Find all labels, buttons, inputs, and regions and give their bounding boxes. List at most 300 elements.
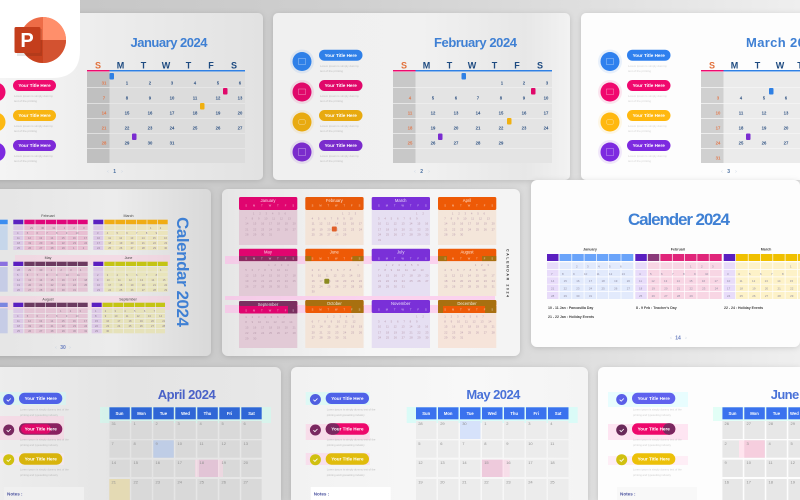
table: January: January bbox=[583, 248, 597, 252]
calendar grid: June: 12 bbox=[790, 460, 796, 465]
table: June: 23 24 25 26 27 28 29 bbox=[97, 288, 168, 292]
calendar grid: March: 25 bbox=[739, 140, 744, 146]
calendar grid: January: 28 bbox=[102, 140, 107, 146]
calendar grid: January: 12 bbox=[216, 96, 221, 100]
month: July: 1 2 3 4 5 6 bbox=[386, 263, 419, 267]
month: June: 16 17 18 19 20 21 22 bbox=[312, 279, 362, 283]
title pills: January bbox=[0, 80, 56, 163]
check list: April: Your Title Here bbox=[25, 396, 57, 401]
table: Februari: 29 30 31 1 2 3 bbox=[30, 226, 85, 230]
table: May: 26 27 28 29 30 31 bbox=[17, 288, 76, 292]
calendar grid: January: 6 bbox=[239, 80, 242, 86]
calendar grid: January: 31 bbox=[170, 140, 175, 146]
pagination: 14: ‹ bbox=[670, 336, 672, 342]
month: January: 21 22 23 24 25 26 27 bbox=[245, 227, 296, 231]
calendar grid: June: Mon bbox=[750, 411, 759, 416]
calendar grid: January: 16 bbox=[148, 110, 153, 116]
month: November: 3 4 5 6 7 8 9 bbox=[378, 319, 418, 323]
calendar grid: February bbox=[393, 60, 552, 163]
icon: PowerPoint logo: P bbox=[20, 30, 34, 52]
table: June: June bbox=[125, 256, 132, 260]
table: Februari: 4 5 6 7 8 9 10 bbox=[17, 231, 79, 235]
month: February: 18 19 20 21 22 23 24 bbox=[312, 227, 362, 231]
table: Februari: Februari bbox=[671, 248, 685, 252]
month: November: 10 11 12 13 14 15 16 bbox=[378, 325, 429, 329]
calendar grid: May: 1 bbox=[484, 421, 487, 426]
month: May bbox=[239, 249, 297, 296]
title: April 2024: April 2024 bbox=[158, 387, 216, 402]
calendar grid: February: M bbox=[423, 60, 430, 70]
table: June bbox=[93, 256, 168, 292]
table: May: 12 13 14 15 16 17 18 bbox=[17, 278, 88, 282]
month: May: May bbox=[264, 249, 273, 254]
table: March: 10 11 12 13 14 15 bbox=[727, 279, 793, 283]
calendar grid: February: 7 bbox=[477, 96, 480, 100]
calendar grid: January: 20 bbox=[238, 110, 243, 116]
event notes: 21 - 22 Jan : Holiday Events bbox=[548, 315, 594, 319]
calendar grid: June: Tue bbox=[773, 411, 781, 416]
calendar grid: February: 3 bbox=[546, 80, 549, 86]
month: November: 24 25 26 27 28 29 30 bbox=[378, 336, 429, 340]
month: August: 11 12 13 14 15 16 17 bbox=[444, 273, 495, 277]
calendar grid: April: Fri bbox=[227, 411, 232, 416]
table: March: 3 4 5 6 7 8 bbox=[727, 272, 784, 276]
calendar grid: May: 16 bbox=[506, 460, 511, 465]
pagination: 3: 3 bbox=[727, 169, 730, 175]
pagination: 14 bbox=[670, 336, 687, 342]
table: Februari: 4 5 6 7 8 9 10 bbox=[639, 272, 709, 276]
highlighted date: June bbox=[324, 279, 329, 284]
calendar grid: March: 17 bbox=[716, 126, 721, 130]
calendar grid: February: S bbox=[401, 60, 407, 70]
highlight bands bbox=[306, 392, 578, 465]
topic list: February: Lorem ipsum is simply dummy bbox=[320, 94, 359, 98]
calendar grid: February: T bbox=[492, 60, 498, 70]
calendar grid: May: 2 bbox=[506, 421, 509, 426]
calendar grid: May: Tue bbox=[467, 411, 474, 416]
title pills: January: Lorem ipsum is simply dummy bbox=[14, 154, 53, 158]
calendar grid: May: Thu bbox=[510, 411, 518, 416]
topic list: March: text of the printing bbox=[628, 159, 651, 163]
month: October: 1 2 3 4 5 bbox=[327, 314, 354, 318]
calendar grid: May: 28 bbox=[418, 421, 423, 426]
event notes: 10 - 11 Jan : Pancasilla Day bbox=[548, 306, 593, 310]
month: August: S M T W T F S bbox=[444, 257, 493, 261]
topic list: March: Lorem ipsum is simply dummy bbox=[628, 94, 667, 98]
table: September: September bbox=[119, 298, 138, 302]
month: February: 11 12 13 14 15 16 17 bbox=[312, 222, 362, 226]
month: January: 28 29 30 31 bbox=[245, 233, 273, 237]
month: February: 25 26 27 28 29 bbox=[312, 233, 347, 237]
calendar grid: January: 15 bbox=[125, 110, 130, 116]
calendar grid: April: Thu bbox=[204, 411, 212, 416]
month: June: 2 3 4 5 6 7 8 bbox=[312, 268, 352, 272]
check list: May: printing and typesetting industry bbox=[327, 443, 365, 447]
calendar grid: February: 27 bbox=[454, 140, 459, 146]
calendar grid: January bbox=[87, 60, 245, 163]
calendar grid: May: Fri bbox=[534, 411, 539, 416]
check list: April: Lorem ipsum is simply dummy text of the bbox=[20, 438, 69, 442]
calendar grid: April: 18 bbox=[200, 460, 205, 465]
month: July bbox=[372, 249, 430, 296]
topic list: March: Lorem ipsum is simply dummy bbox=[628, 154, 667, 158]
calendar grid: March: 3 bbox=[717, 96, 720, 100]
calendar grid: April: Wed bbox=[181, 411, 190, 416]
table: Februari bbox=[13, 214, 88, 250]
month: November: S M T W T F S bbox=[378, 308, 427, 312]
vertical label: CALENDAR 2024: CALENDAR 2024 bbox=[506, 249, 510, 297]
check list: April: printing and typesetting industry bbox=[20, 413, 59, 417]
month: October: October bbox=[327, 301, 342, 306]
month: April: 28 29 30 bbox=[444, 233, 464, 237]
title pills: January: Your Title Here bbox=[18, 143, 51, 148]
calendar grid: January: W bbox=[162, 60, 171, 70]
calendar grid: January: 31 bbox=[102, 80, 107, 86]
month: March: March bbox=[395, 198, 407, 203]
check list: May: Your Title Here bbox=[331, 457, 364, 462]
table: August: 11 12 13 14 15 16 17 bbox=[17, 319, 87, 323]
month: August bbox=[438, 249, 496, 296]
title pills: January: Your Title Here bbox=[18, 113, 51, 118]
topic list: March: text of the printing bbox=[628, 69, 651, 73]
calendar grid: March: W bbox=[776, 60, 785, 70]
month: April: 14 15 16 17 18 19 20 bbox=[444, 222, 495, 226]
table: September: 1 2 3 4 5 6 7 bbox=[95, 309, 156, 313]
panel: May 2024 slide bbox=[291, 367, 588, 500]
month: December bbox=[438, 300, 496, 348]
topic list: March: Lorem ipsum is simply dummy bbox=[628, 124, 667, 128]
calendar grid: April: 4 bbox=[200, 421, 202, 426]
calendar grid: February: 16 bbox=[522, 110, 527, 116]
calendar grid: March: 6 bbox=[785, 96, 788, 100]
calendar grid: February: 4 bbox=[409, 96, 412, 100]
calendar grid: May: Mon bbox=[444, 411, 453, 416]
month: July: July bbox=[397, 249, 405, 254]
calendar grid: February: 21 bbox=[476, 126, 481, 130]
calendar grid: June: 17 bbox=[746, 480, 752, 484]
calendar grid: May: 29 bbox=[440, 421, 445, 426]
calendar grid: June: Wed bbox=[790, 411, 799, 416]
month: June: S M T W T F S bbox=[312, 257, 361, 261]
check list: May: printing and typesetting industry bbox=[327, 473, 365, 477]
check list: May: printing and typesetting industry bbox=[327, 413, 365, 417]
notes box: June: Notes : bbox=[620, 492, 636, 496]
pagination: 2: 2 bbox=[420, 169, 423, 175]
month: August: August bbox=[460, 249, 474, 254]
topic list: March: Your Title Here bbox=[633, 53, 665, 58]
calendar grid: June: 2 bbox=[724, 441, 728, 446]
calendar grid: June: 11 bbox=[768, 460, 773, 465]
calendar grid: January: T bbox=[141, 60, 147, 70]
calendar grid: January: 3 bbox=[171, 80, 174, 86]
calendar grid: April: 24 bbox=[178, 480, 183, 484]
pagination: 2 bbox=[414, 169, 430, 175]
calendar grid: February: 12 bbox=[431, 110, 436, 116]
table: May bbox=[13, 256, 88, 292]
topic list: February: text of the printing bbox=[320, 69, 343, 73]
calendar grid: May: 15 bbox=[484, 460, 489, 465]
pagination: 14: › bbox=[685, 336, 687, 342]
check list: April: Your Title Here bbox=[25, 427, 57, 432]
calendar grid: May: 20 bbox=[440, 480, 445, 484]
table: March: 1 bbox=[790, 264, 792, 268]
calendar grid: April: 31 bbox=[112, 421, 117, 426]
table: August: 18 19 20 21 22 23 24 bbox=[17, 324, 88, 328]
calendar grid: January: 11 bbox=[193, 96, 198, 100]
month: April: 21 22 23 24 25 26 27 bbox=[444, 227, 495, 231]
month: May: S M T W T F S bbox=[245, 257, 294, 261]
title: January 2024: January 2024 bbox=[130, 35, 208, 50]
pagination: 1: › bbox=[121, 169, 123, 175]
calendar grid: January: 26 bbox=[216, 126, 221, 130]
calendar grid: February: 2 bbox=[523, 80, 526, 86]
check list: June: Your Title Here bbox=[638, 427, 670, 432]
table: June: 16 17 18 19 20 21 22 bbox=[97, 283, 168, 287]
topic list: March: Your Title Here bbox=[633, 83, 665, 88]
pagination: 3 bbox=[721, 169, 737, 175]
month: May: 19 20 21 22 23 24 25 bbox=[245, 279, 296, 283]
calendar grid: February: 26 bbox=[431, 140, 436, 146]
table: January bbox=[547, 248, 633, 299]
calendar grid: February: W bbox=[468, 60, 477, 70]
highlight bands bbox=[225, 256, 495, 313]
month: June: 23 24 25 26 27 28 29 bbox=[312, 284, 362, 288]
calendar grid: January: 22 bbox=[125, 126, 130, 130]
calendar grid: January: 1 bbox=[126, 80, 129, 86]
table: January: 14 15 16 17 18 19 20 bbox=[551, 279, 630, 283]
calendar grid: April: Sun bbox=[116, 411, 124, 416]
calendar grid: April: 10 bbox=[178, 441, 183, 446]
calendar grid: May: 10 bbox=[528, 441, 533, 446]
table: Februari: 18 19 20 21 22 23 24 bbox=[639, 286, 718, 290]
calendar grid: January: 29 bbox=[125, 140, 130, 146]
calendar grid: January: 10 bbox=[170, 96, 175, 100]
month: September: 8 9 10 11 12 13 14 bbox=[245, 320, 293, 324]
month: November: 17 18 19 20 21 22 23 bbox=[378, 330, 429, 334]
month: April: 1 2 3 4 5 6 bbox=[452, 211, 486, 215]
calendar grid: April: 12 bbox=[222, 441, 227, 446]
table: January: 2 3 4 5 6 bbox=[576, 264, 622, 268]
calendar grid: March: 4 bbox=[740, 96, 743, 100]
title: Calender 2024: Calender 2024 bbox=[628, 210, 731, 229]
pins: March events bbox=[746, 88, 774, 140]
check list: June: Lorem ipsum is simply dummy text of the bbox=[633, 408, 682, 412]
table: January: 7 8 9 10 11 12 13 bbox=[551, 272, 625, 276]
check list: May: Lorem ipsum is simply dummy text of the bbox=[327, 468, 376, 472]
month: May: 12 13 14 15 16 17 18 bbox=[245, 273, 296, 277]
month: February: 1 2 3 bbox=[342, 211, 357, 215]
calendar grid: May: 18 bbox=[550, 460, 555, 465]
calendar grid: January: M bbox=[117, 60, 124, 70]
calendar grid: February: F bbox=[514, 60, 520, 70]
month: September: 29 30 bbox=[245, 336, 257, 340]
calendar grid: January: 24 bbox=[170, 126, 175, 130]
table: March: 1 2 bbox=[150, 226, 162, 230]
check list: June: printing and typesetting industry bbox=[633, 413, 672, 417]
title pills: January: text of the printing bbox=[14, 129, 37, 133]
calendar grid: May: 25 bbox=[550, 480, 555, 484]
check list: June: Lorem ipsum is simply dummy text of the bbox=[633, 438, 682, 442]
calendar grid: June: 26 bbox=[724, 421, 730, 426]
calendar grid: June: 3 bbox=[746, 441, 750, 446]
month: March: 24 25 26 27 28 29 30 bbox=[378, 233, 429, 237]
calendar grid: February: 20 bbox=[454, 126, 459, 130]
calendar grid: March: M bbox=[731, 60, 738, 70]
calendar grid: March: 24 bbox=[716, 140, 721, 146]
table: August: 1 2 3 bbox=[60, 309, 82, 313]
calendar grid: June: 29 bbox=[790, 421, 796, 426]
month: March bbox=[372, 197, 430, 245]
calendar grid: May: 5 bbox=[418, 441, 421, 446]
highlight bands bbox=[0, 392, 271, 465]
calendar grid: February: 18 bbox=[408, 126, 413, 130]
calendar grid: June: 18 bbox=[768, 480, 774, 484]
calendar grid: May: Wed bbox=[488, 411, 497, 416]
calendar grid: April: 22 bbox=[134, 480, 139, 484]
calendar grid: June: 5 bbox=[790, 441, 794, 446]
calendar grid: April: 13 bbox=[244, 441, 249, 446]
title pills: January: Lorem ipsum is simply dummy bbox=[14, 124, 53, 128]
month: July: 14 15 16 17 18 19 20 bbox=[378, 273, 429, 277]
rotated title: Calendar 2024: Calendar 2024 bbox=[173, 217, 192, 328]
month: December: December bbox=[457, 301, 477, 306]
title pills: January: Lorem ipsum is simply dummy bbox=[14, 94, 53, 98]
pagination: 1: ‹ bbox=[107, 169, 109, 175]
check list: June: Your Title Here bbox=[638, 457, 670, 462]
month: October: 13 14 15 16 17 18 19 bbox=[312, 325, 362, 329]
calendar grid: January: 9 bbox=[149, 96, 152, 100]
calendar grid: April: 2 bbox=[156, 421, 158, 426]
panel: February 2024 slide bbox=[273, 13, 570, 180]
calendar grid: June: 10 bbox=[746, 460, 752, 465]
table: January: 21 22 23 24 25 26 27 bbox=[551, 286, 630, 290]
check list: June: printing and typesetting industry bbox=[633, 443, 672, 447]
notes box: May: Notes : bbox=[314, 492, 330, 496]
month: January: 1 2 3 4 5 6 bbox=[253, 211, 287, 215]
calendar grid: January: T bbox=[186, 60, 192, 70]
calendar grid: April: 23 bbox=[156, 480, 161, 484]
table: March: March bbox=[761, 248, 771, 252]
pagination: 3: › bbox=[735, 169, 737, 175]
month: January: 14 15 16 17 18 19 20 bbox=[245, 222, 296, 226]
calendar grid: February: 1 bbox=[501, 80, 504, 86]
month: October: 20 21 22 23 24 25 26 bbox=[312, 330, 362, 334]
calendar grid: May: 7 bbox=[462, 441, 465, 446]
table: May: 19 20 21 22 23 24 25 bbox=[17, 283, 88, 287]
table: March: 17 18 19 20 21 22 bbox=[727, 286, 794, 290]
event notes: 22 - 24 : Holiday Events bbox=[724, 306, 763, 310]
calendar grid: June: Sun bbox=[729, 411, 737, 416]
topic list: February: text of the printing bbox=[320, 99, 343, 103]
month: January: S M T W T F S bbox=[245, 204, 294, 208]
calendar grid: June: 28 bbox=[768, 421, 774, 426]
calendar grid: May: 23 bbox=[506, 480, 511, 484]
calendar grid: April: 15 bbox=[134, 460, 139, 465]
calendar grid: March: 5 bbox=[763, 96, 766, 100]
calendar grid: January: 30 bbox=[148, 140, 153, 146]
table: August: 25 26 27 28 29 30 31 bbox=[17, 329, 88, 333]
month: May: 1 2 3 4 bbox=[268, 263, 289, 267]
table: March: 3 4 5 6 7 8 9 bbox=[97, 231, 158, 235]
highlighted date: February bbox=[332, 226, 337, 232]
check list: June bbox=[616, 393, 682, 477]
table: March: 10 11 12 13 14 15 16 bbox=[97, 236, 167, 240]
check list: May: Lorem ipsum is simply dummy text of the bbox=[327, 438, 376, 442]
month: August: 4 5 6 7 8 9 10 bbox=[444, 268, 486, 272]
calendar grid: April: 16 bbox=[156, 460, 161, 465]
calendar grid: February: 8 bbox=[500, 96, 503, 100]
table: September bbox=[91, 298, 166, 333]
month: December: 22 23 24 25 26 27 28 bbox=[444, 330, 495, 334]
calendar grid: February: 13 bbox=[454, 110, 459, 116]
calendar grid: February: 24 bbox=[544, 126, 549, 130]
pagination: 30: ‹ bbox=[55, 345, 57, 351]
calendar grid: June: 19 bbox=[790, 480, 796, 484]
month: March: 3 4 5 6 7 8 9 bbox=[378, 216, 418, 220]
pagination: 30 bbox=[55, 345, 71, 351]
calendar grid: May: 19 bbox=[418, 480, 423, 484]
calendar grid: January: 8 bbox=[126, 96, 129, 100]
calendar grid: January: 21 bbox=[102, 126, 107, 130]
calendar grid: March: 12 bbox=[762, 110, 767, 116]
calendar grid: April: 25 bbox=[200, 480, 205, 484]
table: March bbox=[93, 214, 168, 250]
calendar grid: April: 8 bbox=[134, 441, 136, 446]
table: March: 24 25 26 27 28 29 bbox=[727, 294, 794, 298]
topic list: February bbox=[290, 50, 362, 164]
calendar grid: May: 13 bbox=[440, 460, 445, 465]
month: March: 1 2 bbox=[416, 211, 424, 215]
title pills: January: Your Title Here bbox=[18, 83, 51, 88]
notes box: June bbox=[617, 487, 697, 500]
calendar grid: May: 30 bbox=[462, 421, 467, 426]
calendar grid: January: 23 bbox=[148, 126, 153, 130]
check list: April: Lorem ipsum is simply dummy text of the bbox=[20, 408, 69, 412]
pagination: 30: › bbox=[69, 345, 71, 351]
calendar grid: May: 6 bbox=[440, 441, 443, 446]
calendar grid: January: 18 bbox=[193, 110, 198, 116]
calendar grid: January: 2 bbox=[149, 80, 152, 86]
calendar grid: March: 20 bbox=[784, 126, 789, 130]
topic list: February: Your Title Here bbox=[325, 83, 357, 88]
month: March: 10 11 12 13 14 15 16 bbox=[378, 222, 429, 226]
calendar grid: March: 19 bbox=[762, 126, 767, 130]
panel: Calender 2024 slide bbox=[531, 180, 800, 347]
calendar grid: March: 26 bbox=[762, 140, 767, 146]
title pills: January: text of the printing bbox=[14, 159, 37, 163]
check list: June: printing and typesetting industry bbox=[633, 473, 672, 477]
month: October: S M T W T F S bbox=[312, 308, 361, 312]
month: February: February bbox=[326, 198, 344, 203]
month: July: 7 8 9 10 11 12 13 bbox=[378, 268, 424, 272]
month: March: 31 bbox=[378, 238, 382, 242]
calendar grid: January: 4 bbox=[194, 80, 197, 86]
month: April: April bbox=[463, 198, 471, 203]
month: February: 4 5 6 7 8 9 10 bbox=[312, 216, 353, 220]
table: Februari: 25 26 27 28 29 bbox=[639, 294, 693, 298]
calendar grid: May: 8 bbox=[484, 441, 487, 446]
table: September: 29 30 bbox=[95, 329, 110, 333]
month: November: November bbox=[391, 301, 411, 306]
topic list: February: Your Title Here bbox=[325, 53, 357, 58]
month: October: 27 28 29 30 31 bbox=[312, 336, 347, 340]
month: August: 1 2 3 bbox=[475, 263, 489, 267]
calendar grid: February: 6 bbox=[455, 96, 458, 100]
topic list: March: Your Title Here bbox=[633, 113, 665, 118]
month: February: S M T W T F S bbox=[312, 204, 361, 208]
calendar grid: April: Mon bbox=[137, 411, 146, 416]
notes box: May bbox=[311, 487, 391, 500]
